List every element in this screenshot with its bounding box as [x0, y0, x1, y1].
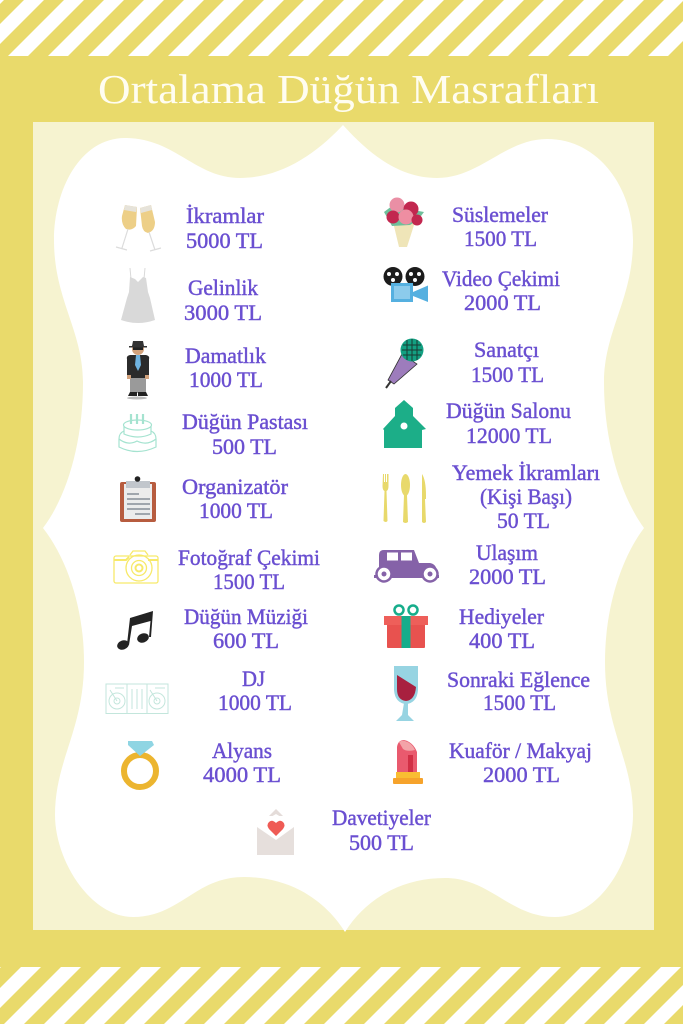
price: 12000 TL [466, 423, 552, 448]
label: Gelinlik [188, 275, 258, 300]
item: Düğün Müziği [116, 604, 308, 653]
icon: clipboard [120, 476, 156, 522]
panel: white ornamental frame [43, 125, 644, 932]
price: 2000 TL [464, 290, 541, 315]
item: Hediyeler [384, 604, 545, 653]
label: Düğün Salonu [446, 398, 571, 423]
item: Düğün Salonu [383, 398, 571, 448]
icon: diamond ring [124, 741, 156, 787]
qualifier: (Kişi Başı) [480, 484, 572, 509]
label: Fotoğraf Çekimi [178, 545, 320, 570]
bottom stripes [0, 967, 683, 1024]
icon: man in suit [127, 341, 149, 400]
price: 1000 TL [199, 498, 273, 523]
top stripes [0, 0, 683, 56]
label: DJ [242, 666, 265, 691]
price: 500 TL [349, 830, 414, 855]
icon: wine glass [394, 666, 418, 721]
label: Ulaşım [476, 540, 538, 565]
price: 1000 TL [218, 690, 292, 715]
price: 1500 TL [464, 226, 537, 251]
label: Video Çekimi [442, 266, 560, 291]
item: Düğün Pastası [119, 409, 308, 459]
item: Kuaför / Makyaj [393, 738, 592, 787]
price: 5000 TL [186, 228, 263, 253]
icon: vintage car [374, 550, 439, 582]
icon: cake [119, 414, 156, 452]
label: Kuaför / Makyaj [449, 738, 592, 763]
item: Video Çekimi [384, 266, 560, 315]
price: 3000 TL [184, 300, 262, 325]
price: 1500 TL [471, 362, 544, 387]
icon: microphone [386, 338, 424, 388]
icon: champagne glasses [116, 205, 161, 251]
item: İkramlar [116, 203, 265, 253]
label: Düğün Pastası [182, 409, 308, 434]
price: 2000 TL [483, 762, 560, 787]
item: Süslemeler [384, 198, 549, 251]
item: Sonraki Eğlence [394, 666, 590, 721]
label: Süslemeler [452, 202, 549, 227]
icon: cutlery [382, 474, 426, 523]
icon: DJ decks [106, 684, 168, 714]
title: Ortalama Düğün Masrafları [98, 66, 599, 112]
item: Sanatçı [386, 337, 544, 388]
icon: dress [121, 268, 155, 323]
label: Düğün Müziği [184, 604, 308, 629]
item: Alyans [124, 738, 281, 787]
price: 500 TL [212, 434, 277, 459]
price: 2000 TL [469, 564, 546, 589]
item: Damatlık [127, 341, 266, 400]
icon: lipstick [393, 740, 423, 784]
price: 400 TL [469, 628, 535, 653]
label: İkramlar [186, 203, 265, 228]
item: Organizatör [120, 474, 289, 523]
icon: envelope with heart [257, 809, 294, 855]
label: Yemek İkramları [452, 460, 600, 485]
icon: bouquet [384, 198, 424, 247]
panel: pale yellow backing [33, 122, 654, 930]
label: Hediyeler [459, 604, 545, 629]
item: DJ [106, 666, 292, 715]
label: Sanatçı [474, 337, 539, 362]
item: Fotoğraf Çekimi [114, 545, 320, 594]
price: 600 TL [213, 628, 279, 653]
item: Yemek İkramları [382, 460, 600, 533]
item: Gelinlik [121, 268, 262, 325]
item: Davetiyeler [257, 805, 432, 855]
label: Davetiyeler [332, 805, 432, 830]
icon: video camera [384, 267, 428, 302]
price: 1000 TL [189, 367, 263, 392]
label: Organizatör [182, 474, 289, 499]
icon: camera [114, 551, 158, 583]
label: Alyans [212, 738, 272, 763]
price: 1500 TL [483, 690, 556, 715]
label: Damatlık [185, 343, 266, 368]
price: 1500 TL [213, 569, 285, 594]
item: Ulaşım [374, 540, 546, 589]
icon: chapel [383, 400, 426, 448]
icon: gift box [384, 606, 428, 648]
price: 4000 TL [203, 762, 281, 787]
label: Sonraki Eğlence [447, 667, 590, 692]
price: 50 TL [497, 508, 550, 533]
icon: music notes [116, 611, 153, 651]
